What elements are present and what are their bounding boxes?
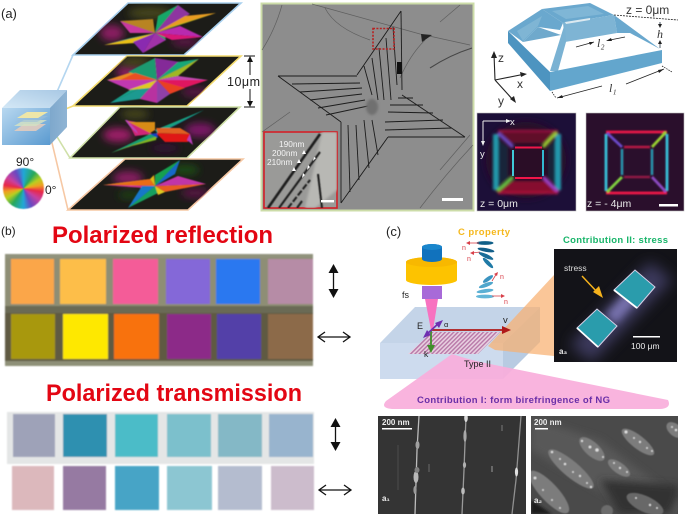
- fluorescence image z=0: [477, 113, 576, 211]
- scale bar: [633, 336, 660, 338]
- C property ellipsoids: n: [462, 245, 466, 252]
- frame label l2: l₂: [597, 36, 605, 50]
- hatched Type II region: [408, 332, 500, 354]
- layer 4 star pattern: [68, 159, 243, 210]
- label Type II: Type II: [464, 359, 491, 369]
- micrograph a1: [378, 414, 526, 514]
- dimension lines: [552, 15, 678, 98]
- panel label (b): (b): [1, 224, 16, 238]
- polarization arrow vertical (transmission): [330, 418, 340, 451]
- stress micrograph: 100 μm: [631, 341, 660, 351]
- SEM inset with slit widths: 200nm: [272, 148, 297, 158]
- panel: transmission swatches: [7, 412, 314, 510]
- SEM inset with slit widths: 210nm: [267, 157, 292, 167]
- micrograph a1: 200 nm: [382, 418, 410, 427]
- label fs: fs: [402, 290, 410, 300]
- C property ellipsoids: [462, 241, 508, 306]
- red dotted selection box: [373, 28, 394, 49]
- fluorescence image z=0: y: [480, 149, 485, 160]
- xyz axes: [491, 51, 527, 108]
- stress micrograph: [554, 249, 677, 362]
- polarization arrow vertical (reflection): [328, 264, 338, 298]
- 10 µm dimension marker: [226, 56, 260, 107]
- xyz axes: z: [498, 51, 504, 65]
- C property ellipsoids: n: [500, 274, 504, 281]
- top row swatches: [13, 414, 313, 457]
- connector lines from cube to layers: [48, 55, 73, 210]
- panel label (c): (c): [386, 224, 401, 239]
- 10 µm dimension marker: 10μm: [227, 75, 260, 89]
- wheel label 90 degrees: 90°: [16, 155, 34, 169]
- panel label (a): (a): [1, 6, 17, 21]
- C property ellipsoids: n: [504, 299, 508, 306]
- sample cube: [2, 90, 67, 145]
- micrograph a2: a₂: [534, 496, 542, 505]
- SEM inset with slit widths: 190nm: [279, 139, 304, 149]
- star outline and slits: [278, 11, 465, 203]
- fluorescence image z=0: z = 0μm: [480, 198, 518, 210]
- micrograph a2: 200 nm: [534, 418, 562, 427]
- axis arrows inside image: [483, 121, 508, 143]
- micrograph a1: a₁: [382, 494, 390, 503]
- panel: reflection swatches: [5, 254, 313, 366]
- glass block: [380, 307, 540, 379]
- polarization arrow horizontal (transmission): [319, 485, 351, 495]
- micrograph a2: [523, 416, 685, 515]
- polarization arrow horizontal (reflection): [318, 332, 350, 342]
- SEM image of star structure: [262, 4, 474, 210]
- frame label z = 0 µm: z = 0μm: [626, 3, 669, 17]
- frame label h: h: [657, 27, 663, 41]
- polarization and motion arrows: [417, 315, 511, 359]
- pink beam to form birefringence: [384, 354, 669, 409]
- frame label l1: l₁: [609, 81, 617, 95]
- orientation colour wheel: [2, 168, 44, 208]
- cracks: [262, 4, 473, 208]
- polarization and motion arrows: E: [417, 321, 423, 331]
- bottom row swatches: [11, 314, 313, 359]
- fs objective: [406, 244, 457, 330]
- layer 2 star pattern: [73, 56, 241, 106]
- SEM inset with slit widths: [264, 132, 337, 208]
- heading: C property: C property: [458, 227, 511, 238]
- wheel label 0 degrees: 0°: [45, 183, 57, 197]
- scale bar: [442, 198, 463, 201]
- stress arrow: [582, 276, 598, 293]
- orange beam to stress image: [488, 275, 554, 356]
- polarization and motion arrows: α: [444, 320, 449, 329]
- bottom row swatches: [12, 466, 314, 510]
- fluorescence image z=0: x: [510, 117, 515, 128]
- layer 1 star pattern: [73, 3, 241, 55]
- heading: contribution I: Contribution I: form birefringence of NG: [417, 395, 610, 406]
- C property ellipsoids: n: [467, 256, 471, 263]
- xyz axes: y: [498, 94, 504, 108]
- heading: polarized transmission: Polarized transmission: [46, 380, 302, 407]
- 3D frame diagram: [508, 3, 678, 98]
- top row swatches: [11, 259, 313, 304]
- xyz axes: x: [517, 77, 523, 91]
- fluorescence image z=-4: z = - 4μm: [587, 198, 632, 210]
- layer 3 star pattern: [70, 107, 240, 158]
- polarization and motion arrows: k: [424, 349, 429, 359]
- fluorescence image z=-4: [586, 113, 684, 211]
- polarization and motion arrows: v: [503, 315, 508, 326]
- stress micrograph: stress: [564, 263, 587, 273]
- heading: contribution II: Contribution II: stress: [563, 235, 668, 246]
- stress micrograph: a₃: [559, 347, 567, 356]
- heading: polarized reflection: Polarized reflection: [52, 222, 273, 249]
